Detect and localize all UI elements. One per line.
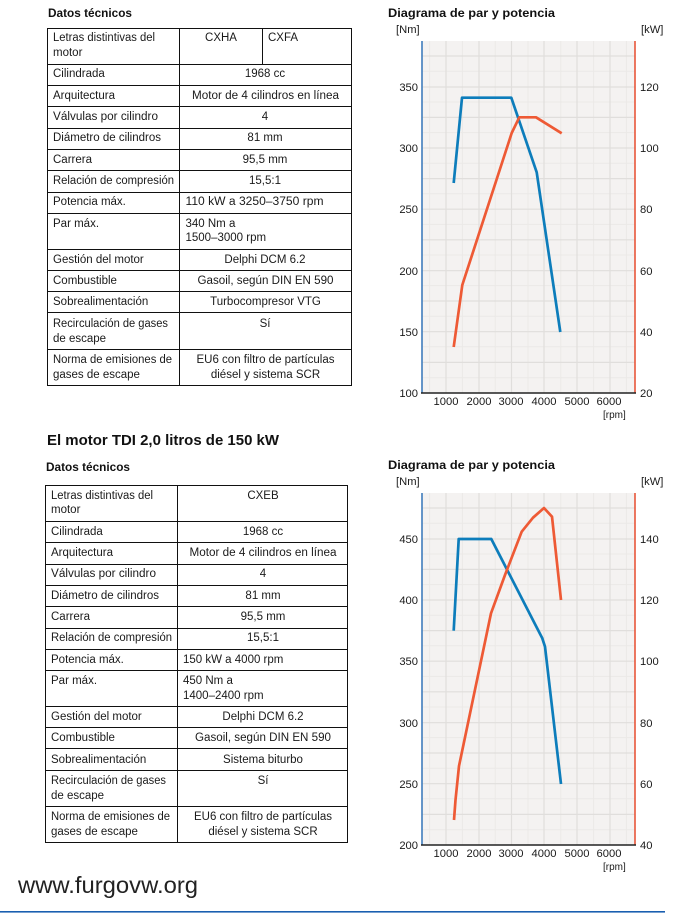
row: combustible: Combustible bbox=[53, 275, 117, 287]
x axis labels: 5000 bbox=[565, 396, 589, 408]
row: cilindrada: 1968 cc bbox=[245, 68, 285, 80]
curve: par (torque) bbox=[454, 98, 560, 332]
row: recirculación bbox=[51, 775, 269, 802]
row: letras distintivas: Letras distintivas del bbox=[53, 32, 155, 44]
row: letras distintivas: motor bbox=[53, 47, 83, 59]
row: par máximo: 450 Nm a bbox=[183, 675, 233, 687]
x axis labels: 4000 bbox=[532, 396, 556, 408]
row: arquitectura: Arquitectura bbox=[51, 547, 114, 559]
left axis labels: 350 bbox=[399, 656, 418, 668]
row: combustible bbox=[53, 275, 334, 287]
row: recirculación: de escape bbox=[51, 790, 104, 802]
curve: potencia (power) bbox=[454, 117, 562, 347]
row: válvulas: Válvulas por cilindro bbox=[51, 568, 156, 580]
right axis labels: 120 bbox=[640, 595, 659, 607]
row: relación de compresión: Relación de compresión bbox=[51, 632, 172, 644]
right axis labels: 120 bbox=[640, 82, 659, 94]
row: potencia máxima: 150 kW a 4000 rpm bbox=[183, 654, 283, 666]
x axis labels: 2000 bbox=[467, 396, 491, 408]
row: carrera bbox=[51, 611, 285, 623]
row: carrera: Carrera bbox=[53, 154, 93, 166]
right axis labels bbox=[640, 476, 663, 852]
row: relación de compresión bbox=[53, 175, 281, 187]
row: carrera: Carrera bbox=[51, 611, 91, 623]
left axis labels: 250 bbox=[399, 779, 418, 791]
row: par máximo: Par máx. bbox=[51, 675, 97, 687]
row: recirculación: Recirculación de gases bbox=[51, 775, 166, 787]
row: gestión: Delphi DCM 6.2 bbox=[222, 711, 304, 723]
x axis labels: [rpm] bbox=[603, 410, 626, 421]
row: sobrealimentación: Turbocompresor VTG bbox=[210, 296, 321, 308]
right axis labels: 20 bbox=[640, 388, 652, 400]
row: sobrealimentación: Sobrealimentación bbox=[51, 754, 146, 766]
right axis labels: 100 bbox=[640, 143, 659, 155]
right axis labels: 100 bbox=[640, 656, 659, 668]
row: sobrealimentación bbox=[51, 754, 303, 766]
row: diámetro: Diámetro de cilindros bbox=[51, 590, 159, 602]
row: cilindrada: Cilindrada bbox=[53, 68, 105, 80]
row: válvulas: 4 bbox=[260, 568, 267, 580]
x axis labels: 2000 bbox=[467, 848, 491, 860]
row: letras distintivas: CXEB bbox=[247, 490, 279, 502]
row: norma de emisiones: diésel y sistema SCR bbox=[208, 826, 318, 838]
row: válvulas: Válvulas por cilindro bbox=[53, 111, 158, 123]
row: relación de compresión: 15,5:1 bbox=[247, 632, 279, 644]
right axis labels: [kW] bbox=[641, 476, 663, 488]
row: potencia máxima bbox=[53, 196, 324, 208]
row: gestión bbox=[53, 254, 306, 266]
row: combustible: Combustible bbox=[51, 732, 115, 744]
right axis labels: 80 bbox=[640, 718, 652, 730]
x axis labels: 3000 bbox=[499, 848, 523, 860]
left axis labels: [Nm] bbox=[396, 24, 420, 36]
row: potencia máxima: 110 kW a 3250–3750 rpm bbox=[186, 196, 324, 208]
left axis labels: 450 bbox=[399, 534, 418, 546]
row: potencia máxima: Potencia máx. bbox=[53, 196, 126, 208]
row: cilindrada: 1968 cc bbox=[243, 526, 283, 538]
table: datos técnicos motor 150 kW bbox=[46, 486, 348, 842]
x axis labels: 1000 bbox=[434, 396, 458, 408]
row: relación de compresión: Relación de compresión bbox=[53, 175, 174, 187]
row: cilindrada: Cilindrada bbox=[51, 526, 103, 538]
x axis labels bbox=[434, 848, 626, 873]
axes bbox=[421, 41, 636, 393]
row: combustible: Gasoil, según DIN EN 590 bbox=[195, 732, 331, 744]
right axis labels: 140 bbox=[640, 534, 659, 546]
right axis labels bbox=[640, 24, 663, 400]
row: norma de emisiones: EU6 con filtro de partículas bbox=[196, 354, 335, 366]
row: norma de emisiones: gases de escape bbox=[51, 826, 138, 838]
left axis labels: 250 bbox=[399, 204, 418, 216]
row: válvulas: 4 bbox=[262, 111, 269, 123]
plot background bbox=[422, 493, 635, 845]
left axis labels: 350 bbox=[399, 82, 418, 94]
row: norma de emisiones bbox=[51, 811, 332, 838]
right axis labels: 80 bbox=[640, 204, 652, 216]
row: potencia máxima bbox=[51, 654, 283, 666]
row: letras distintivas: CXFA bbox=[268, 32, 298, 44]
row: par máximo: 1400–2400 rpm bbox=[183, 690, 264, 702]
left axis labels: 300 bbox=[399, 718, 418, 730]
row: norma de emisiones: EU6 con filtro de partículas bbox=[194, 811, 332, 823]
row: relación de compresión bbox=[51, 632, 279, 644]
left axis labels: 400 bbox=[399, 595, 418, 607]
row: recirculación bbox=[53, 318, 271, 345]
right axis labels: 40 bbox=[640, 327, 652, 339]
row: gestión: Delphi DCM 6.2 bbox=[224, 254, 306, 266]
row: gestión: Gestión del motor bbox=[53, 254, 144, 266]
right axis labels: [kW] bbox=[641, 24, 663, 36]
row: carrera: 95,5 mm bbox=[243, 154, 287, 166]
row: gestión bbox=[51, 711, 304, 723]
x axis labels bbox=[434, 396, 626, 421]
curve: par (torque) bbox=[454, 539, 561, 784]
left axis labels bbox=[396, 476, 420, 852]
left axis labels: 100 bbox=[399, 388, 418, 400]
row: combustible: Gasoil, según DIN EN 590 bbox=[198, 275, 334, 287]
left axis labels: 300 bbox=[399, 143, 418, 155]
row: diámetro bbox=[53, 132, 283, 144]
x axis labels: 1000 bbox=[434, 848, 458, 860]
x axis labels: [rpm] bbox=[603, 862, 626, 873]
row: recirculación: Sí bbox=[260, 318, 271, 330]
row: potencia máxima: Potencia máx. bbox=[51, 654, 124, 666]
x axis labels: 5000 bbox=[565, 848, 589, 860]
row: norma de emisiones: diésel y sistema SCR bbox=[211, 369, 320, 381]
row: arquitectura bbox=[53, 90, 340, 102]
row: diámetro: 81 mm bbox=[247, 132, 283, 144]
row: par máximo: 1500–3000 rpm bbox=[186, 232, 266, 244]
row: gestión: Gestión del motor bbox=[51, 711, 142, 723]
row: diámetro bbox=[51, 590, 281, 602]
row: letras distintivas: CXHA bbox=[205, 32, 237, 44]
x axis labels: 6000 bbox=[597, 848, 621, 860]
row: diámetro: Diámetro de cilindros bbox=[53, 132, 161, 144]
right axis labels: 60 bbox=[640, 266, 652, 278]
row: sobrealimentación: Sistema biturbo bbox=[223, 754, 303, 766]
row: sobrealimentación bbox=[53, 296, 321, 308]
row: carrera bbox=[53, 154, 287, 166]
footer line bbox=[0, 911, 665, 913]
x axis labels: 6000 bbox=[597, 396, 621, 408]
chart: par y potencia 150 kW bbox=[396, 476, 663, 873]
row: válvulas bbox=[51, 568, 267, 580]
row: norma de emisiones: gases de escape bbox=[53, 369, 140, 381]
row: letras distintivas: Letras distintivas del bbox=[51, 490, 153, 502]
row: letras distintivas bbox=[51, 490, 279, 516]
row: arquitectura bbox=[51, 547, 337, 559]
row: recirculación: Sí bbox=[258, 775, 269, 787]
row: arquitectura: Motor de 4 cilindros en línea bbox=[190, 547, 337, 559]
row: cilindrada bbox=[53, 68, 285, 80]
row: recirculación: Recirculación de gases bbox=[53, 318, 168, 330]
x axis labels: 3000 bbox=[499, 396, 523, 408]
row: válvulas bbox=[53, 111, 269, 123]
left axis labels: 200 bbox=[399, 266, 418, 278]
right axis labels: 60 bbox=[640, 779, 652, 791]
table: datos técnicos motor 110 kW bbox=[48, 28, 352, 386]
row: norma de emisiones: Norma de emisiones de bbox=[53, 354, 172, 366]
row: letras distintivas bbox=[53, 32, 298, 59]
left axis labels: [Nm] bbox=[396, 476, 420, 488]
left axis labels: 150 bbox=[399, 327, 418, 339]
plot background bbox=[422, 41, 635, 393]
row: relación de compresión: 15,5:1 bbox=[249, 175, 281, 187]
row: carrera: 95,5 mm bbox=[241, 611, 285, 623]
left axis labels: 200 bbox=[399, 840, 418, 852]
row: letras distintivas: motor bbox=[51, 504, 81, 516]
curve: potencia (power) bbox=[454, 508, 561, 820]
axes bbox=[421, 493, 636, 845]
row: norma de emisiones bbox=[53, 354, 335, 381]
left axis labels bbox=[396, 24, 420, 400]
heading: diagrama 1: Diagrama de par y potencia bbox=[388, 6, 555, 20]
row: recirculación: de escape bbox=[53, 333, 106, 345]
row: combustible bbox=[51, 732, 331, 744]
row: par máximo bbox=[53, 218, 266, 244]
row: sobrealimentación: Sobrealimentación bbox=[53, 296, 148, 308]
row: diámetro: 81 mm bbox=[245, 590, 281, 602]
heading: motor 150 kW: El motor TDI 2,0 litros de 150 kW bbox=[47, 432, 280, 449]
row: par máximo: 340 Nm a bbox=[186, 218, 236, 230]
right axis labels: 40 bbox=[640, 840, 652, 852]
row: arquitectura: Motor de 4 cilindros en línea bbox=[192, 90, 340, 102]
heading: datos técnicos 1: Datos técnicos bbox=[48, 6, 132, 20]
heading: diagrama 2: Diagrama de par y potencia bbox=[388, 458, 555, 472]
row: par máximo bbox=[51, 675, 264, 702]
chart: par y potencia 110 kW bbox=[396, 24, 663, 421]
row: cilindrada bbox=[51, 526, 283, 538]
x axis labels: 4000 bbox=[532, 848, 556, 860]
row: arquitectura: Arquitectura bbox=[53, 90, 116, 102]
row: norma de emisiones: Norma de emisiones de bbox=[51, 811, 170, 823]
row: par máximo: Par máx. bbox=[53, 218, 99, 230]
heading: datos técnicos 2: Datos técnicos bbox=[46, 460, 130, 474]
watermark: www.furgovw.org bbox=[17, 872, 198, 898]
